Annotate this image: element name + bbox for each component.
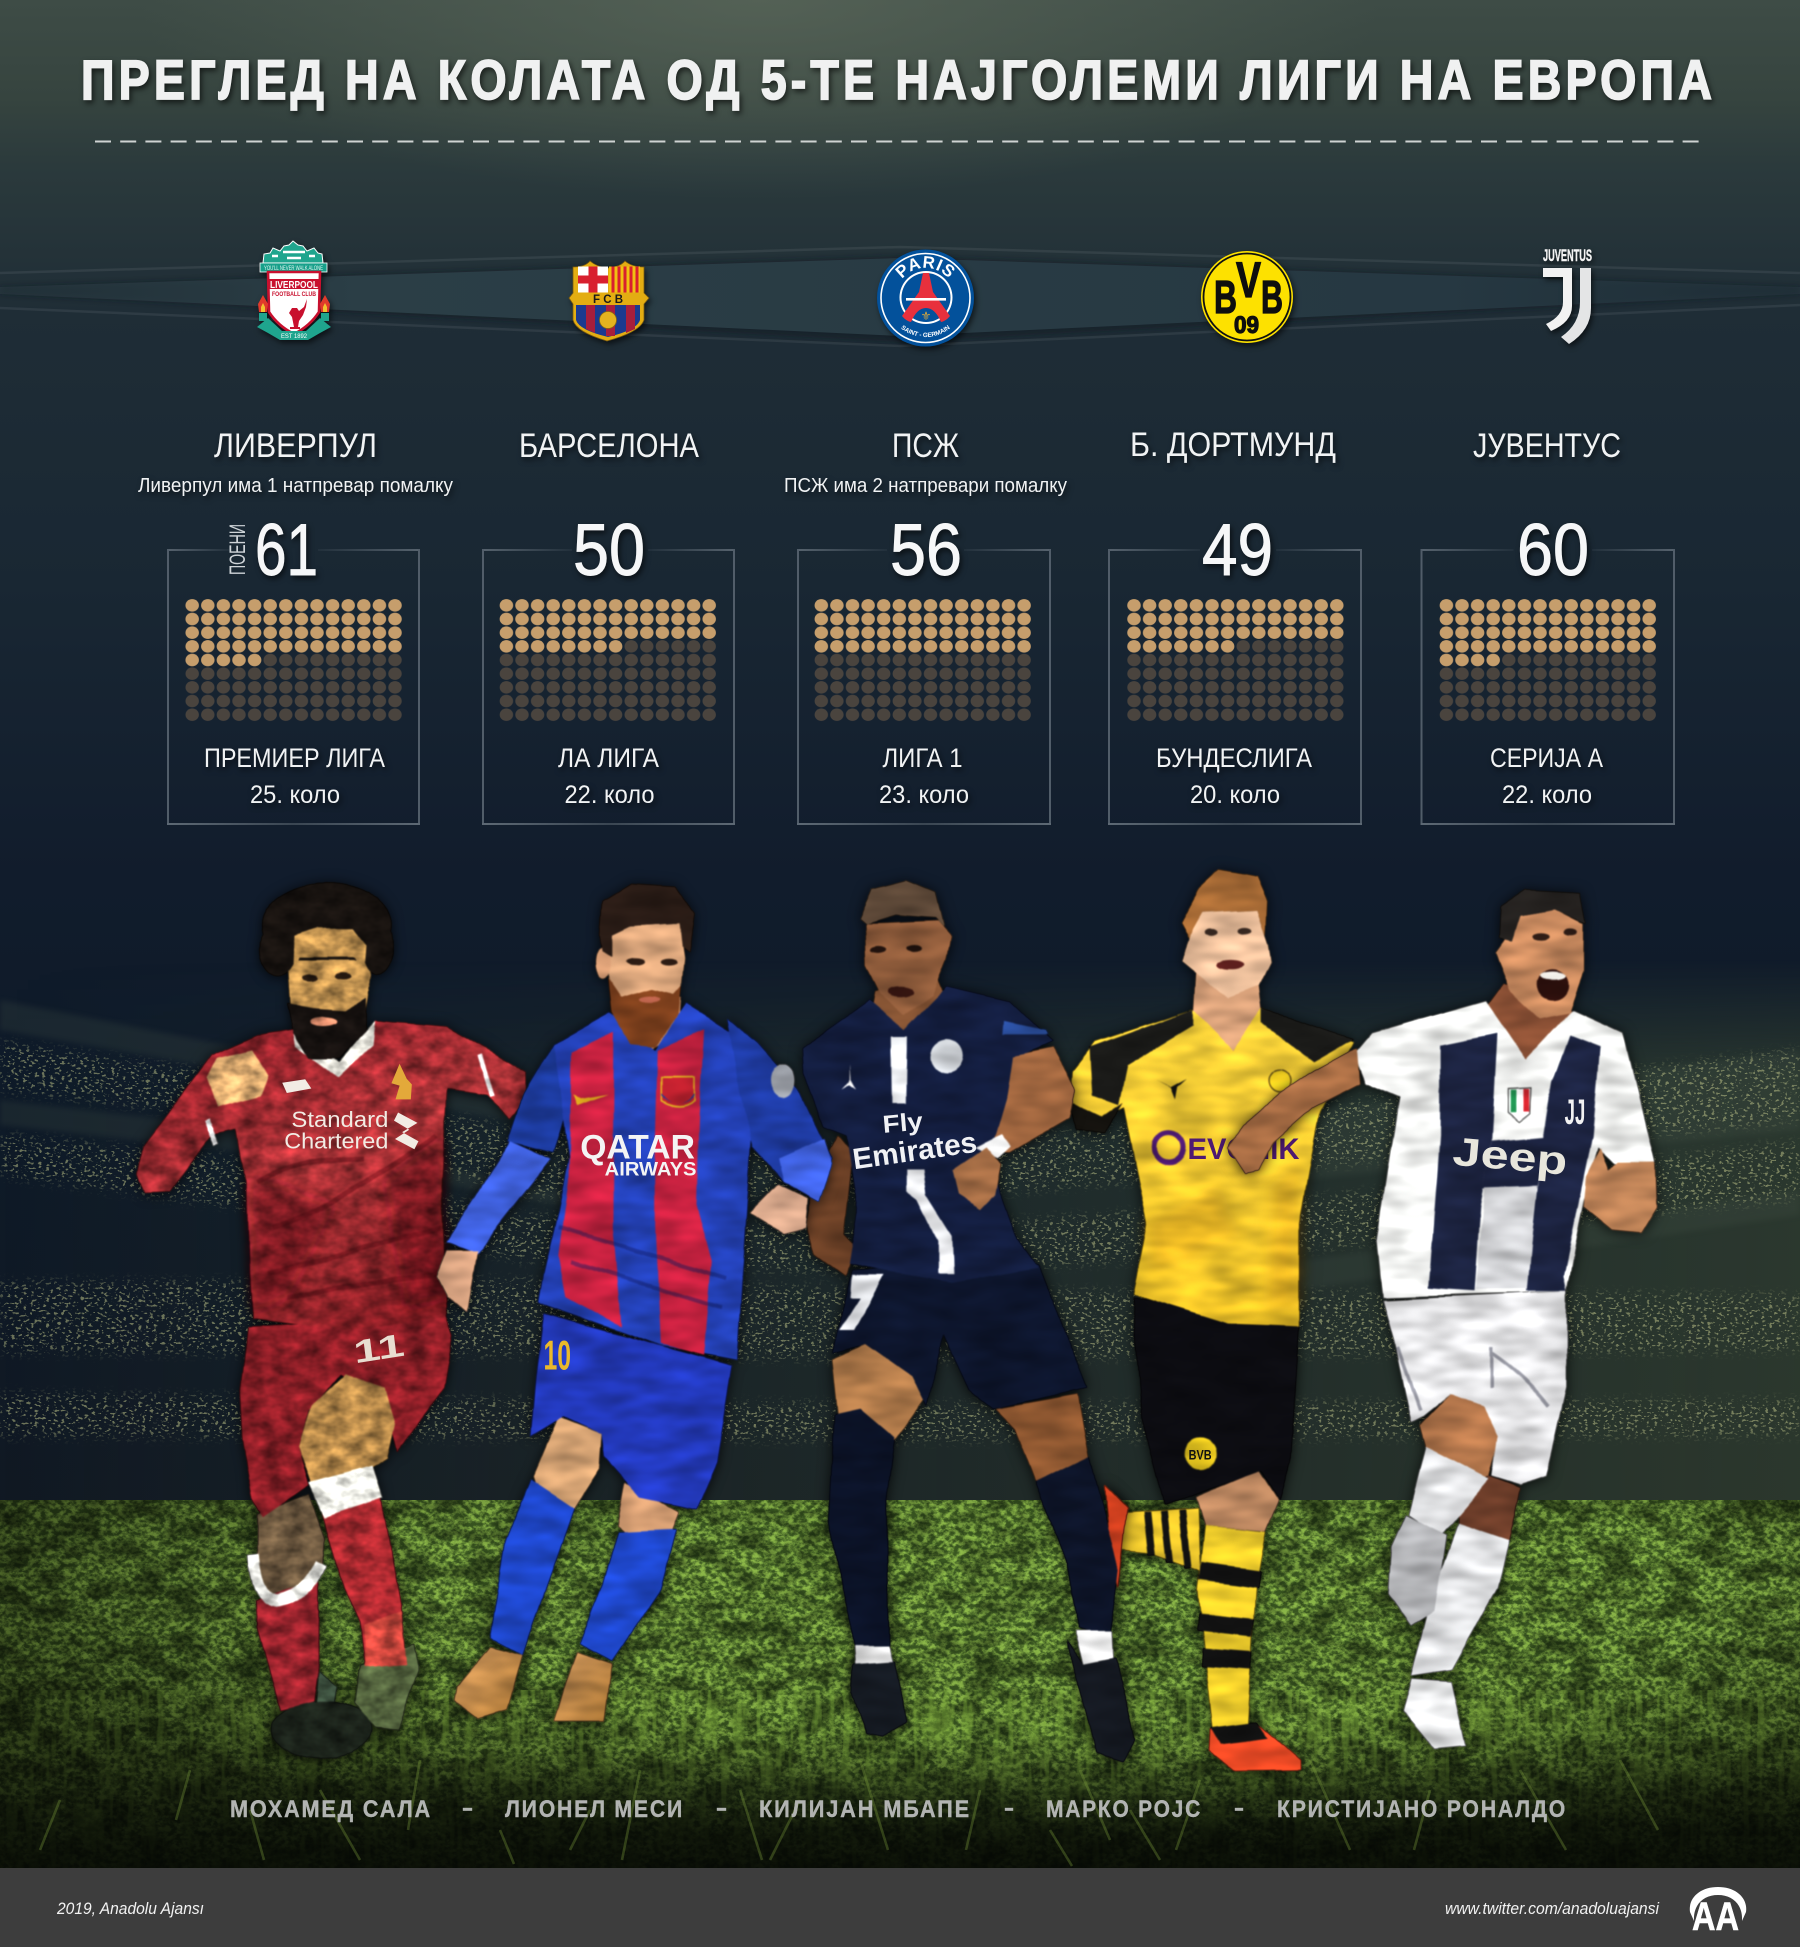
crest: Liverpool [257,241,331,340]
points value: 49 [1202,510,1273,591]
league: ЛИГА 1 [882,743,962,773]
player: Mohamed Salah [138,882,526,1758]
centre swoosh band behind the crests [0,247,1800,346]
footer bar [0,1868,1800,1947]
crest: Borussia Dortmund: V [1236,252,1261,308]
panel: Dortmund standings [1108,426,1362,825]
grass pitch [0,1500,1800,1868]
crest: Borussia Dortmund: B [1214,271,1237,323]
crest: PSG: ⚜ [921,309,931,323]
Liverpool jersey sponsor: Standard [291,1108,388,1132]
crest: Barcelona [569,261,649,341]
league: БУНДЕСЛИГА [1156,743,1312,773]
team name: ЛИВЕРПУЛ [214,427,377,465]
crest: Juventus: JUVENTUS [1543,246,1592,265]
round: 23. коло [879,781,969,809]
player names row: МОХАМЕД САЛА [230,1796,432,1823]
points value: 60 [1517,510,1589,591]
player: Marco Reus [1070,871,1354,1771]
crest: PSG: SAINT - GERMAIN [901,325,950,338]
box outline [1420,549,1675,825]
crest: Juventus [1543,246,1592,344]
PSG jersey sponsor: Fly [882,1108,924,1139]
box outline [1108,549,1362,825]
Barcelona jersey sponsor: QATAR [580,1128,695,1166]
crest: Borussia Dortmund [1201,251,1293,343]
box outline [797,549,1051,825]
panel: PSG standings [784,427,1067,825]
background: sky gradient and stadium [0,0,1800,1500]
round: 22. коло [1502,781,1592,809]
Barcelona shorts number: 10 [543,1334,571,1379]
player: Kylian Mbappe [802,881,1136,1761]
crest: Liverpool: YOU'LL NEVER WALK ALONE [264,266,323,272]
crest: Liverpool: FOOTBALL CLUB [272,292,317,298]
dot chart: 49 points [1126,598,1345,722]
Liverpool jersey sponsor [282,1079,418,1154]
player names row: МАРКО РОЈС [1046,1796,1202,1823]
round: 22. коло [564,781,654,809]
crest: Barcelona: FCB [593,294,623,306]
Barcelona jersey sponsor [580,1128,697,1180]
Dortmund shorts crest: BVB [1189,1446,1212,1463]
crest: Borussia Dortmund: B [1261,271,1283,323]
player names row: ЛИОНЕЛ МЕСИ [505,1796,684,1823]
team name: Б. ДОРТМУНД [1130,426,1336,464]
round: 20. коло [1190,781,1280,809]
note: games in hand: ПСЖ има 2 натпревари помалку [784,475,1067,497]
Liverpool jersey sponsor: Chartered [284,1130,388,1154]
points label: ПОЕНИ [225,524,250,575]
points value: 56 [890,510,962,591]
box outline [167,549,420,825]
box outline [482,549,735,825]
round: 25. коло [250,781,340,809]
panel: Liverpool standings [138,427,453,825]
footer credit: 2019, Anadolu Ajansı [56,1899,204,1918]
player names row [230,1796,1567,1823]
panel: Juventus standings [1420,427,1675,825]
player names row: КИЛИЈАН МБАПЕ [759,1796,971,1823]
crest: PSG [876,250,978,352]
crest: Liverpool: LIVERPOOL [270,280,318,291]
Barcelona jersey sponsor: AIRWAYS [605,1159,697,1180]
league: СЕРИЈА А [1490,743,1603,773]
crest: PSG: PARIS [895,256,954,278]
dot chart: 56 points [814,598,1032,722]
Liverpool shorts number: 11 [351,1327,406,1371]
player names row: КРИСТИЈАНО РОНАЛДО [1277,1796,1567,1823]
league: ПРЕМИЕР ЛИГА [204,743,385,773]
crest: Borussia Dortmund: 09 [1234,312,1259,339]
footer social link: www.twitter.com/anadoluajansi [1445,1899,1660,1918]
league: ЛА ЛИГА [558,743,659,773]
crest: Liverpool: EST 1892 [281,334,308,340]
points value: 61 [255,510,318,591]
panel: Barcelona standings [482,427,735,825]
note: game in hand: Ливерпул има 1 натпревар помалку [138,475,453,497]
title divider dashed line [95,140,1707,142]
player: Lionel Messi [436,883,832,1721]
player: Cristiano Ronaldo [1228,889,1657,1749]
team name: БАРСЕЛОНА [519,427,699,465]
dot chart: 61 points [184,598,403,722]
team name: ЈУВЕНТУС [1473,427,1621,465]
dot chart: 60 points [1439,598,1657,722]
Juventus jersey sponsor: Jeep [1451,1129,1569,1184]
Liverpool crest on jersey [391,1064,412,1099]
points value: 50 [573,510,645,591]
team name: ПСЖ [892,427,959,465]
dot chart: 50 points [499,598,717,722]
icon: Anadolu Agency logo: AA [1692,1895,1739,1939]
PSG jersey sponsor: Emirates [851,1126,979,1176]
Juventus crest on jersey: JJ [1565,1093,1585,1132]
Dortmund jersey sponsor: EVONIK [1188,1134,1300,1166]
